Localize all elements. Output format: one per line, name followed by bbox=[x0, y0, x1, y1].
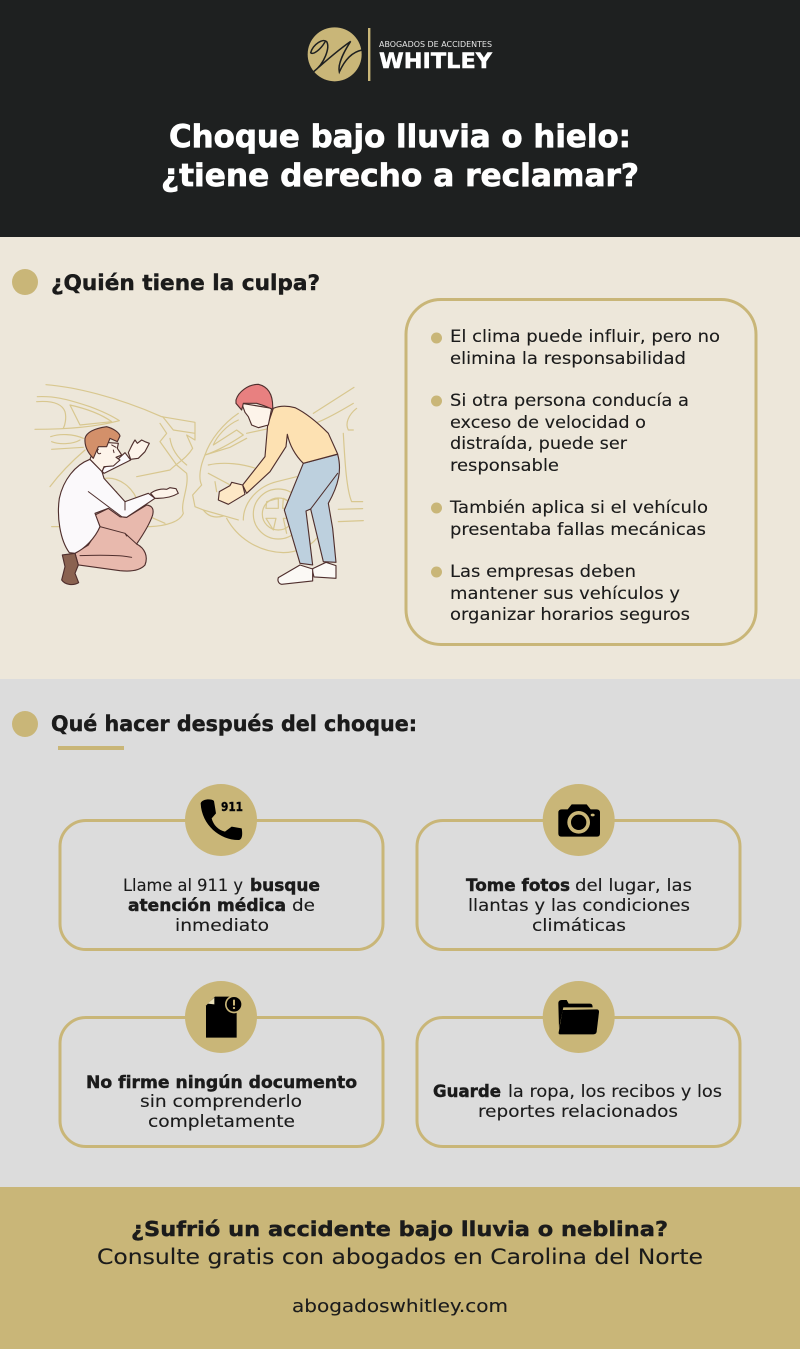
card text: Tome fotos bbox=[466, 876, 570, 895]
right car outline bbox=[193, 387, 363, 553]
left man bbox=[58, 427, 178, 585]
card text: busque bbox=[250, 876, 320, 895]
left man head bbox=[90, 442, 122, 472]
bullet: empresas bbox=[431, 562, 690, 625]
card text: atención médica bbox=[128, 896, 286, 915]
bullet: fallas: presentaba fallas mecánicas bbox=[450, 520, 706, 540]
right man bbox=[218, 384, 340, 584]
card text bbox=[123, 876, 320, 935]
bullet: fallas bbox=[431, 498, 708, 540]
card text: la ropa, los recibos y los bbox=[508, 1082, 722, 1101]
logo name: WHITLEY bbox=[379, 49, 493, 73]
card text: Llame al 911 y bbox=[123, 876, 243, 895]
card text: sin comprenderlo bbox=[140, 1092, 302, 1111]
card text bbox=[466, 876, 692, 935]
bullet: empresas: organizar horarios seguros bbox=[450, 605, 690, 625]
bullet: velocidad bbox=[431, 391, 689, 476]
left man lower hand bbox=[151, 488, 178, 498]
card: llame al 911 bbox=[60, 784, 383, 950]
bullet: velocidad: Si otra persona conducía a bbox=[450, 391, 689, 411]
panel: responsibility list bbox=[406, 300, 756, 644]
bullet: empresas: Las empresas deben bbox=[450, 562, 636, 582]
bullet: velocidad: responsable bbox=[450, 456, 559, 476]
bullet: empresas: mantener sus vehículos y bbox=[450, 584, 680, 604]
right man trousers bbox=[284, 454, 340, 565]
left man trouser creases bbox=[80, 527, 137, 557]
card text: reportes relacionados bbox=[478, 1102, 678, 1121]
section: quién tiene la culpa bbox=[0, 237, 800, 679]
bullet: velocidad: exceso de velocidad o bbox=[450, 413, 646, 433]
section marker bbox=[12, 711, 38, 737]
logo tagline: ABOGADOS DE ACCIDENTES bbox=[379, 40, 492, 49]
bullet: fallas: También aplica si el vehículo bbox=[449, 498, 708, 518]
header band bbox=[0, 0, 800, 237]
footer call to action bbox=[0, 1187, 800, 1349]
card text: del lugar, las bbox=[575, 876, 692, 895]
card text: No firme ningún documento bbox=[86, 1073, 357, 1092]
icon: document alert bbox=[185, 981, 257, 1053]
icon: camera bbox=[543, 784, 615, 856]
bullet: clima: elimina la responsabilidad bbox=[450, 349, 686, 369]
card text: de bbox=[292, 896, 315, 915]
bullet: velocidad: distraída, puede ser bbox=[450, 434, 627, 454]
card text: inmediato bbox=[175, 916, 269, 935]
logo monogram bbox=[308, 27, 362, 81]
section heading: Qué hacer después del choque: bbox=[51, 712, 417, 737]
card text: climáticas bbox=[532, 916, 626, 935]
right man trouser crease bbox=[311, 473, 338, 509]
bullet: clima bbox=[431, 327, 720, 369]
left man boot bbox=[62, 553, 79, 585]
footer subline: Consulte gratis con abogados en Carolina del Norte bbox=[97, 1245, 703, 1269]
card text bbox=[86, 1073, 357, 1131]
card text bbox=[433, 1082, 722, 1121]
right man hand bbox=[218, 482, 245, 504]
icon: phone 911 bbox=[185, 784, 257, 856]
bullet: clima: El clima puede influir, pero no bbox=[450, 327, 720, 347]
card text: Guarde bbox=[433, 1082, 501, 1101]
left man face details bbox=[97, 445, 116, 454]
section heading: ¿Quién tiene la culpa? bbox=[51, 271, 320, 296]
section: qué hacer después del choque bbox=[0, 679, 800, 1187]
left man hair bbox=[85, 427, 120, 458]
left man arm crease bbox=[88, 492, 125, 517]
right man back shoe bbox=[312, 562, 336, 578]
right man front shoe bbox=[278, 565, 313, 584]
right man hair bbox=[236, 384, 273, 410]
card text: completamente bbox=[148, 1112, 295, 1131]
left man raised hand bbox=[128, 440, 149, 459]
title: ¿tiene derecho a reclamar? bbox=[161, 158, 639, 194]
logo bbox=[308, 27, 493, 81]
left car outline bbox=[35, 385, 195, 527]
card text: llantas y las condiciones bbox=[468, 896, 690, 915]
right man sweater bbox=[243, 406, 338, 493]
card: guarde bbox=[417, 981, 740, 1146]
right man head bbox=[242, 403, 272, 428]
title bbox=[161, 119, 639, 194]
left man pants bbox=[75, 505, 153, 571]
illustration: two drivers beside crashed cars bbox=[35, 384, 363, 585]
car outlines bbox=[35, 385, 363, 553]
icon: phone 911: 911 bbox=[221, 799, 243, 814]
footer website: abogadoswhitley.com bbox=[292, 1296, 508, 1317]
logo divider bbox=[368, 28, 370, 81]
card: no firme bbox=[60, 981, 383, 1146]
heading underline bbox=[58, 746, 124, 750]
section marker bbox=[12, 269, 38, 295]
footer headline: ¿Sufrió un accidente bajo lluvia o neblina? bbox=[131, 1217, 668, 1241]
icon: folder bbox=[543, 981, 615, 1053]
title: Choque bajo lluvia o hielo: bbox=[169, 119, 631, 155]
left man shirt bbox=[58, 453, 155, 553]
card: tome fotos bbox=[417, 784, 740, 950]
